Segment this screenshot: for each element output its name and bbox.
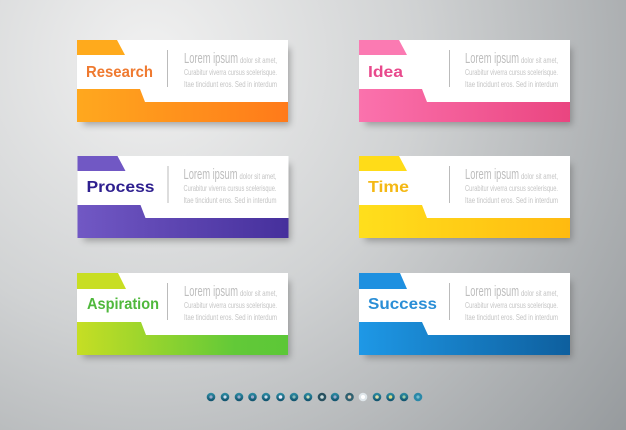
panel: success	[359, 273, 572, 358]
panel: time: Lorem ipsum	[465, 166, 519, 183]
panel: research: Research	[86, 64, 153, 81]
panel: process: Process	[86, 179, 155, 196]
panel: research: Curabitur viverra cursus scelerisque.	[184, 67, 277, 77]
panel: aspiration: Aspiration	[87, 296, 159, 313]
panel: time: dolor sit amet,	[521, 171, 558, 181]
panel: research: Lorem ipsum	[184, 50, 238, 67]
panel: aspiration: Curabitur viverra cursus scelerisque.	[184, 300, 277, 310]
panel: idea	[359, 40, 572, 125]
panel: idea: Itae tincidunt eros. Sed in interdum	[465, 79, 558, 89]
panel: success: Curabitur viverra cursus scelerisque.	[465, 300, 558, 310]
panel: success: dolor sit amet,	[521, 288, 558, 298]
panel: research: dolor sit amet,	[240, 55, 277, 65]
icon row	[207, 393, 422, 401]
panel: research: Itae tincidunt eros. Sed in interdum	[184, 79, 277, 89]
panel: time: Time	[368, 179, 409, 196]
panel: time: Curabitur viverra cursus scelerisque.	[465, 183, 558, 193]
panel: process	[78, 156, 290, 241]
panel: aspiration: Lorem ipsum	[184, 283, 238, 300]
panel: success: Lorem ipsum	[465, 283, 519, 300]
panel: process: dolor sit amet,	[240, 171, 276, 181]
panel: idea: Idea	[368, 64, 403, 81]
panel: process: Lorem ipsum	[184, 166, 238, 183]
panel: idea: Curabitur viverra cursus scelerisque.	[465, 67, 558, 77]
panel: success: Success	[368, 296, 437, 313]
panel: research	[77, 40, 290, 125]
panel: process: Curabitur viverra cursus scelerisque.	[184, 183, 276, 193]
panel: aspiration	[77, 273, 290, 358]
panel: idea: dolor sit amet,	[521, 55, 558, 65]
panel: aspiration: Itae tincidunt eros. Sed in interdum	[184, 312, 277, 322]
panel: time	[359, 156, 572, 241]
panel: process: Itae tincidunt eros. Sed in interdum	[184, 195, 276, 205]
panel: time: Itae tincidunt eros. Sed in interdum	[465, 195, 558, 205]
panel: success: Itae tincidunt eros. Sed in interdum	[465, 312, 558, 322]
panel: aspiration: dolor sit amet,	[240, 288, 277, 298]
panel: idea: Lorem ipsum	[465, 50, 519, 67]
